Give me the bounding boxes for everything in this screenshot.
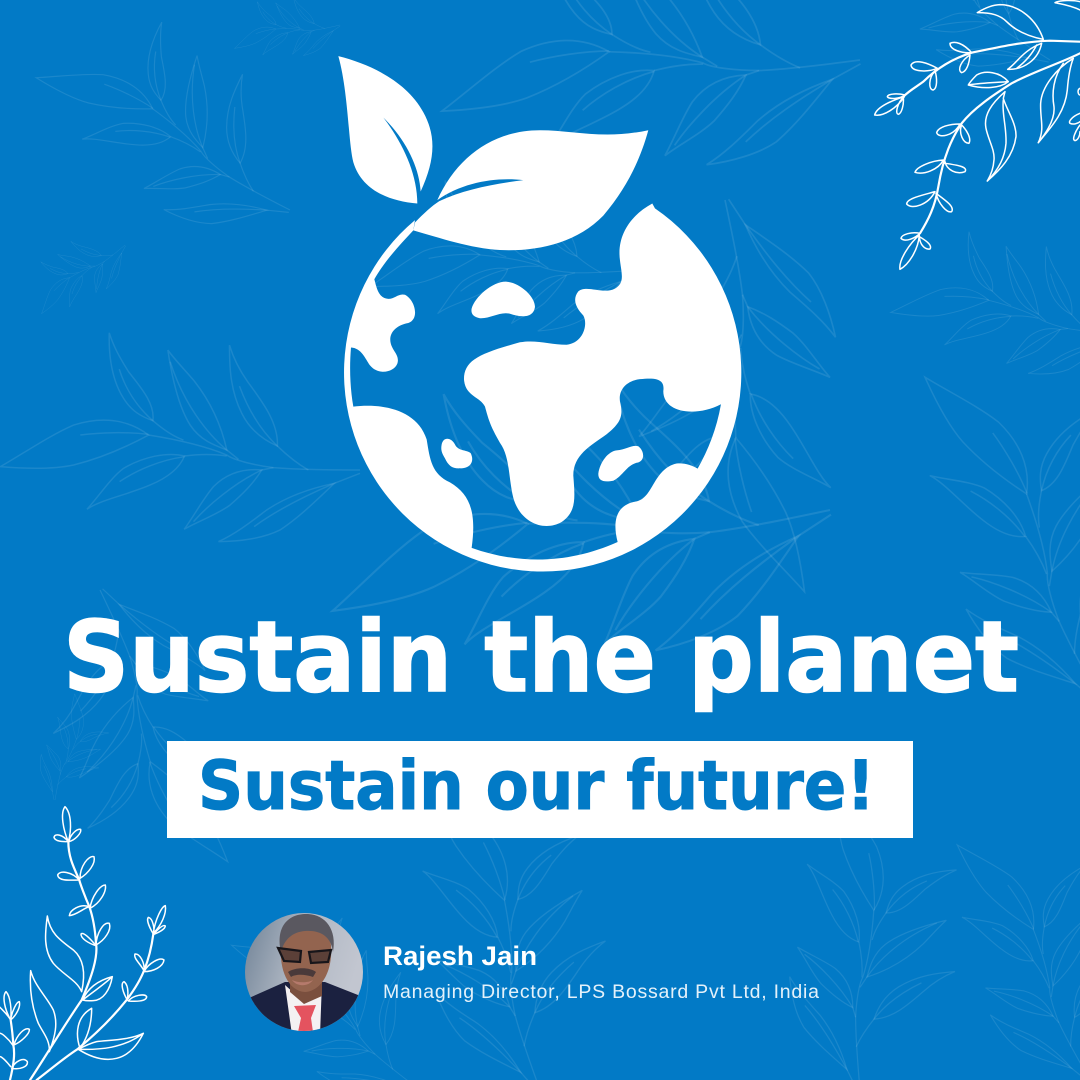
icon: north island bbox=[471, 282, 535, 318]
decorative branch: bottom left bbox=[0, 807, 166, 1080]
author name: Rajesh Jain bbox=[383, 941, 537, 971]
subtitle banner bbox=[167, 741, 913, 838]
icon: globe ring and continents bbox=[344, 204, 741, 572]
icon: east island bbox=[598, 446, 643, 481]
title: Sustain the planet bbox=[63, 601, 1019, 715]
decorative branch: top right bbox=[875, 1, 1080, 269]
icon: globe with two leaves bbox=[338, 56, 741, 572]
icon: west island bbox=[441, 439, 472, 468]
icon: lower leaf bbox=[413, 130, 648, 250]
icon: upper leaf bbox=[338, 56, 432, 204]
banner background bbox=[167, 741, 913, 838]
author role: Managing Director, LPS Bossard Pvt Ltd, India bbox=[383, 981, 819, 1003]
banner text: Sustain our future! bbox=[198, 747, 875, 826]
portrait photo bbox=[245, 913, 363, 1031]
